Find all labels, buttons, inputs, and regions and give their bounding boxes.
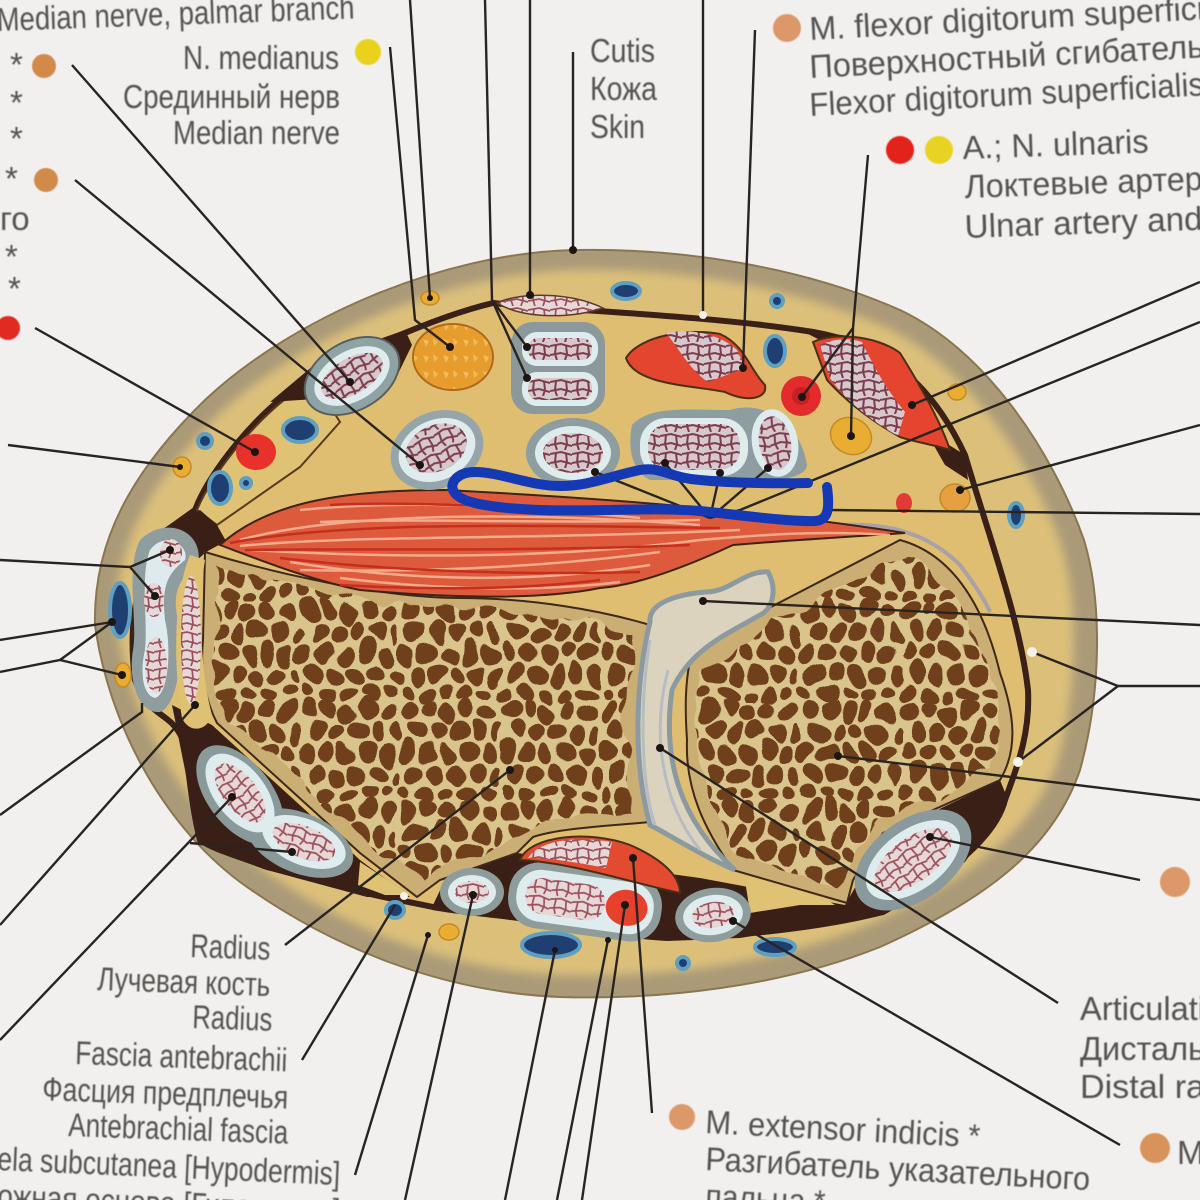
pronator quadratus muscle <box>220 490 905 596</box>
palmaris longus <box>497 295 603 316</box>
extensor digiti minimi tendon <box>672 883 754 947</box>
label: radius: Radius <box>190 927 271 967</box>
extensor carpi ulnaris tendon <box>836 789 990 931</box>
label: extensor indicis: M. extensor indicis * <box>705 1103 981 1154</box>
left edge label fragments: * <box>5 238 18 275</box>
label: extensor indicis <box>705 1103 1091 1200</box>
label: skin <box>590 32 658 145</box>
label: median nerve: Срединный нерв <box>123 78 340 115</box>
hypodermis fat <box>116 270 1074 975</box>
label: distal radioulnar joint <box>1080 990 1200 1105</box>
flexor carpi radialis tendon <box>291 321 413 431</box>
label: radius: Radius <box>192 998 273 1038</box>
left edge label fragments: * <box>8 270 21 307</box>
label: flexor digitorum superficialis <box>808 0 1200 123</box>
label: antebrachial fascia: Фасция предплечья <box>42 1070 289 1116</box>
extensor carpi radialis tendons <box>179 730 363 892</box>
skin layer <box>95 250 1097 997</box>
label: skin: Кожа <box>590 70 658 107</box>
flexor digitorum superficialis muscle <box>626 331 765 398</box>
left edge label fragments: * <box>10 84 23 121</box>
label: ulnar artery and nerve: A.; N. ulnaris <box>962 123 1149 166</box>
flexor pollicis longus tendon <box>377 395 497 505</box>
deep flexor tendon <box>526 418 620 488</box>
label: antebrachial fascia: Antebrachial fascia <box>68 1106 289 1151</box>
label: radius: Лучевая кость <box>97 960 271 1003</box>
extensor pollicis longus tendon <box>440 868 504 916</box>
vessel compartment <box>197 387 340 525</box>
hand-drawn blue marker outline <box>452 469 828 521</box>
extensor indicis muscle <box>520 837 680 893</box>
nerves <box>115 291 970 940</box>
label: skin: Skin <box>590 108 645 145</box>
leader endpoints <box>108 246 1037 953</box>
label: extensor indicis: Разгибатель указательного <box>705 1140 1091 1197</box>
deep flexor tendon group <box>630 406 807 480</box>
label: ulnar artery and nerve: Ulnar artery and <box>964 200 1200 245</box>
synovial sheath stripe <box>840 525 990 612</box>
label: median nerve: Median nerve <box>173 114 340 151</box>
label: median nerve: N. medianus <box>183 39 339 76</box>
veins <box>110 283 1023 969</box>
left edge label fragments: * <box>10 120 23 157</box>
median nerve <box>413 324 493 390</box>
dark connective tissue <box>160 330 1008 940</box>
left edge label fragments <box>0 46 30 307</box>
abductor and extensor tendon column <box>132 528 199 712</box>
label: antebrachial fascia: Fascia antebrachii <box>75 1034 288 1078</box>
articular disc and joint <box>638 572 773 870</box>
label: distal radioulnar joint: Distal ra <box>1080 1068 1200 1105</box>
left edge label fragments: го <box>0 200 30 237</box>
radius bone <box>202 552 650 897</box>
fat wedge under radius <box>358 862 410 895</box>
superficial flexor tendons <box>511 322 605 414</box>
deep fascia boundary <box>133 303 1028 938</box>
ulna bone <box>686 540 1012 903</box>
label: median nerve <box>123 39 340 151</box>
flexor carpi ulnaris muscle <box>813 337 950 450</box>
label: flexor digitorum superficialis: Поверхностный сгибатель <box>808 27 1200 85</box>
arteries <box>236 376 912 513</box>
fat wedge under ulna <box>745 870 835 913</box>
left edge label fragments: * <box>5 160 18 197</box>
label: hypodermis: ela subcutanea [Hypodermis] <box>0 1140 341 1192</box>
label: skin: Cutis <box>590 32 655 69</box>
extensor pollicis sliver <box>176 555 212 729</box>
panel: wrist cross-section <box>95 250 1097 997</box>
label: antebrachial fascia <box>42 1034 289 1151</box>
label: radius <box>97 927 273 1038</box>
label: ulnar artery and nerve <box>962 123 1200 245</box>
left edge label fragments: * <box>10 46 23 83</box>
extensor digitorum tendons <box>504 859 666 945</box>
